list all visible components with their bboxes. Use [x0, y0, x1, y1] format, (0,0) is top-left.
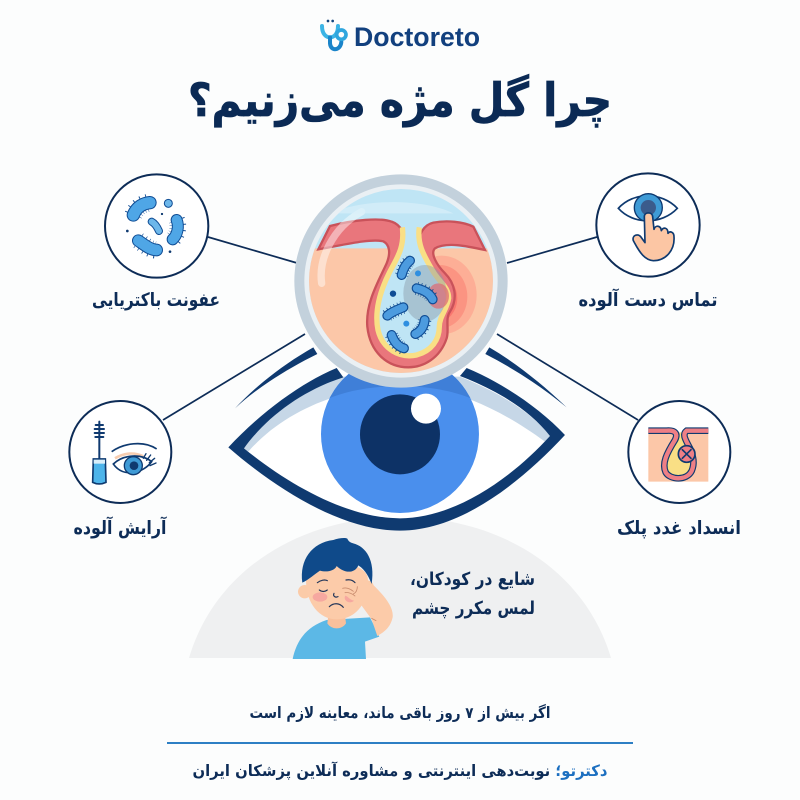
- neck: [327, 615, 346, 628]
- eye white: [228, 368, 565, 531]
- panel: child rubbing eye: [293, 538, 535, 659]
- eyelid shade: [244, 377, 550, 452]
- skin: [309, 248, 493, 373]
- hand: [342, 584, 366, 601]
- gland lumen with yellow lining: [377, 227, 449, 356]
- connector lines: [163, 237, 638, 420]
- ears: [298, 585, 311, 598]
- label: آرایش آلوده: [74, 516, 167, 539]
- cheeks: [313, 592, 327, 602]
- panel: bacterial infection: [92, 174, 220, 311]
- iris: [321, 355, 479, 513]
- label: تماس دست آلوده: [578, 288, 718, 311]
- line: bacterial infection: [208, 237, 297, 263]
- left eyelid crease: [235, 347, 317, 408]
- highlight: [411, 394, 441, 424]
- line: contaminated makeup: [163, 334, 305, 420]
- background: grey semicircle: [189, 517, 611, 658]
- logo: Doctoreto: [322, 20, 480, 52]
- brows, eye and mouth: [317, 580, 355, 607]
- warning text: اگر بیش از ۷ روز باقی ماند، معاینه لازم است: [249, 703, 550, 722]
- central eye: [228, 347, 567, 531]
- label: عفونت باکتریایی: [92, 290, 220, 311]
- title: چرا گل مژه می‌زنیم؟: [188, 73, 612, 128]
- line: blocked gland: [497, 334, 638, 420]
- eyelid band and gland wall: [318, 220, 485, 367]
- panel: contaminated hand: [578, 173, 718, 311]
- label: انسداد غدد پلک: [617, 518, 741, 539]
- caption: [410, 569, 535, 619]
- lens ring: [294, 174, 508, 388]
- wordmark: Doctoreto: [354, 22, 480, 52]
- icon: bacteria: [105, 174, 208, 278]
- shirt: [293, 617, 379, 659]
- panel: contaminated makeup: [69, 401, 171, 539]
- lens liquid: [309, 189, 493, 373]
- glass highlight: [321, 212, 362, 283]
- face: [306, 564, 368, 619]
- footer text: دکترتو؛ نوبت‌دهی اینترنتی و مشاوره آنلاین پزشکان ایران: [192, 761, 608, 781]
- icon: stethoscope logo: [322, 20, 346, 49]
- icon: child: [293, 538, 393, 659]
- inflammation halo: [435, 256, 476, 334]
- caption: لمس مکرر چشم: [412, 598, 535, 619]
- bacteria in gland: [387, 261, 433, 348]
- upper and lower lid outline: [228, 368, 565, 531]
- line: dirty hand: [507, 237, 597, 263]
- magnifier lens: inflamed gland: [294, 174, 508, 388]
- hair: [302, 538, 372, 584]
- icon: mascara and eye: [69, 401, 171, 503]
- right eyelid crease: [485, 347, 567, 407]
- caption: شایع در کودکان،: [410, 569, 535, 590]
- panel: blocked gland: [617, 401, 741, 539]
- icon: finger touching eye: [596, 173, 700, 277]
- icon: blocked eyelid gland: [628, 401, 730, 503]
- pupil: [360, 394, 440, 474]
- pus cloud: [403, 265, 447, 322]
- arm: [360, 585, 393, 636]
